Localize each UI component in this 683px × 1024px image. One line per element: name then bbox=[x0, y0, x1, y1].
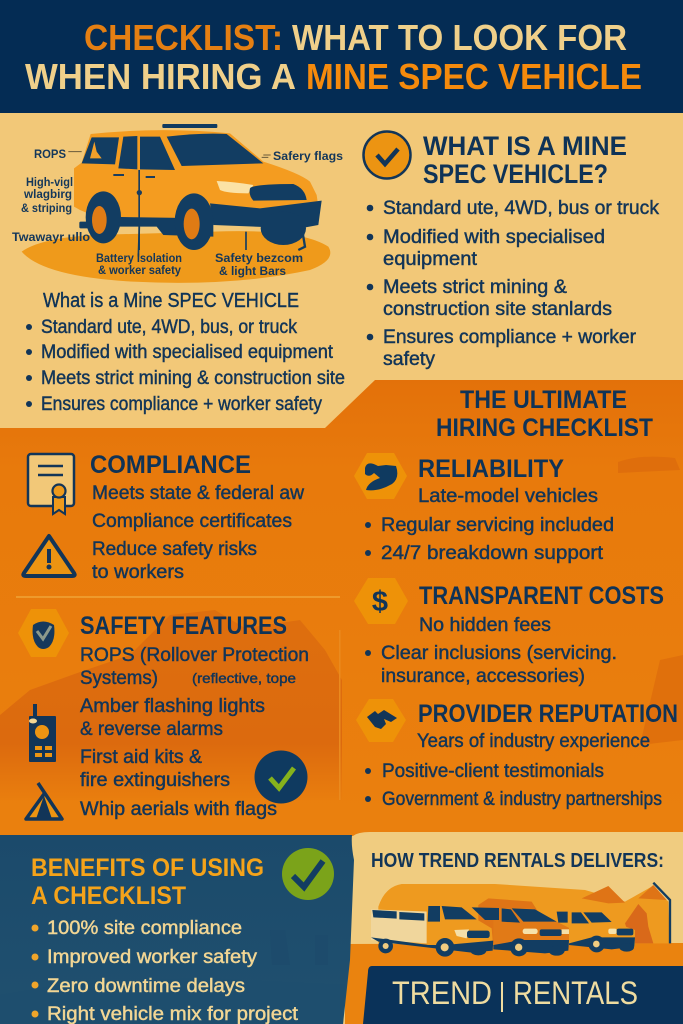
section: safety features: fire extinguishers bbox=[80, 770, 230, 791]
icon: safety shield hexagon bbox=[18, 609, 69, 657]
section: transparent costs: No hidden fees bbox=[419, 615, 551, 636]
icon: radio bbox=[29, 704, 56, 762]
section: provider reputation: Years of industry experience bbox=[417, 731, 650, 752]
list: what is a mine spec vehicle, right: Modified with specialised bbox=[383, 227, 605, 248]
heading: what is a mine spec vehicle: SPEC VEHICLE? bbox=[423, 159, 608, 189]
icon: warning triangle bbox=[23, 536, 75, 576]
section: safety features: Systems) bbox=[80, 668, 158, 689]
heading: what is a mine spec vehicle: WHAT IS A MINE bbox=[423, 131, 627, 161]
minibus bbox=[371, 909, 428, 943]
panel: orange checklist background bbox=[0, 380, 683, 836]
vehicle callout labels: & light Bars bbox=[219, 264, 286, 278]
section: reliability bbox=[365, 455, 614, 564]
section: compliance bbox=[90, 451, 304, 583]
illustration: vehicle fleet and landscape bbox=[371, 883, 670, 957]
heading: what is a mine spec vehicle bbox=[423, 131, 627, 189]
icon: dollar hexagon: $ bbox=[372, 586, 388, 618]
suv middle bbox=[472, 907, 570, 948]
list: what is a mine spec vehicle, right: Meets strict mining & bbox=[383, 277, 567, 298]
logo: trend rentals: RENTALS bbox=[513, 975, 638, 1011]
section: reliability: Regular servicing included bbox=[381, 515, 614, 536]
text block: what is a mine spec vehicle, left: What is a Mine SPEC VEHICLE bbox=[43, 290, 299, 312]
section: safety features: (reflective, tope bbox=[192, 670, 296, 686]
section: safety features: Amber flashing lights bbox=[80, 696, 265, 717]
panel: cream background bbox=[0, 113, 683, 433]
icon: green check badge bbox=[254, 750, 308, 804]
illustration: mine spec vehicle bbox=[22, 124, 330, 283]
text block: what is a mine spec vehicle, left bbox=[26, 290, 345, 415]
heading: the ultimate hiring checklist bbox=[436, 386, 653, 442]
logo: trend rentals bbox=[363, 966, 683, 1024]
section: safety features: & reverse alarms bbox=[80, 719, 223, 740]
section: reliability: RELIABILITY bbox=[418, 455, 564, 483]
list: benefits: Improved worker safety bbox=[47, 947, 258, 968]
heading: benefits bbox=[31, 854, 264, 910]
icon: reliability arm hexagon bbox=[354, 453, 407, 499]
section: compliance: to workers bbox=[92, 562, 184, 583]
text block: what is a mine spec vehicle, left: Ensures compliance + worker safety bbox=[41, 394, 322, 415]
section: safety features: SAFETY FEATURES bbox=[80, 612, 287, 640]
list: what is a mine spec vehicle, right: Ensures compliance + worker bbox=[383, 327, 637, 348]
text block: what is a mine spec vehicle, left: Modified with specialised equipment bbox=[41, 342, 334, 363]
icon: tent bbox=[26, 783, 62, 819]
icon: orange check badge bbox=[364, 132, 410, 178]
vehicle callout labels: Twawayr ullo bbox=[12, 230, 90, 244]
title: WHEN HIRING A bbox=[25, 56, 296, 97]
heading: the ultimate hiring checklist: HIRING CHECKLIST bbox=[436, 414, 653, 442]
section: reliability: Late-model vehicles bbox=[418, 486, 598, 507]
section: safety features: Whip aerials with flags bbox=[80, 799, 277, 820]
vehicle callout labels: Battery Isolation bbox=[96, 251, 182, 265]
text block: what is a mine spec vehicle, left: Meets strict mining & construction site bbox=[41, 368, 345, 389]
suv right bbox=[557, 912, 635, 947]
icon: handshake hexagon bbox=[356, 699, 406, 742]
section: provider reputation: Positive-client testimonials bbox=[382, 761, 604, 782]
section: provider reputation: Government & industry partnerships bbox=[382, 789, 662, 810]
section: compliance: COMPLIANCE bbox=[90, 451, 251, 479]
icon: compliance certificate bbox=[28, 454, 74, 514]
vehicle callout labels: Safety bezcom bbox=[215, 251, 303, 265]
section: compliance: Reduce safety risks bbox=[92, 539, 257, 560]
title: CHECKLIST: bbox=[84, 17, 283, 58]
list: what is a mine spec vehicle, right: construction site stanlards bbox=[383, 299, 612, 320]
list: what is a mine spec vehicle, right: Standard ute, 4WD, bus or truck bbox=[383, 198, 660, 219]
title: WHAT TO LOOK FOR bbox=[292, 17, 627, 58]
vehicle callout labels: ROPS bbox=[34, 147, 66, 161]
logo: trend rentals: TREND bbox=[392, 975, 492, 1011]
heading: benefits: BENEFITS OF USING bbox=[31, 854, 264, 882]
section: transparent costs bbox=[365, 582, 664, 687]
section: transparent costs: Clear inclusions (servicing. bbox=[381, 643, 617, 664]
list: benefits: Zero downtime delays bbox=[47, 976, 245, 997]
section: safety features: First aid kits & bbox=[80, 747, 202, 768]
vehicle callout labels: High-vigl bbox=[26, 175, 73, 189]
text block: what is a mine spec vehicle, left: Standard ute, 4WD, bus, or truck bbox=[41, 317, 297, 338]
title: MINE SPEC VEHICLE bbox=[306, 56, 642, 97]
panel: benefits of using a checklist bbox=[0, 835, 354, 1024]
section: compliance: Meets state & federal aw bbox=[92, 483, 304, 504]
section: reliability: 24/7 breakdown support bbox=[381, 543, 604, 564]
header bbox=[0, 0, 683, 113]
list: what is a mine spec vehicle, right: equipment bbox=[383, 249, 478, 270]
section: provider reputation bbox=[365, 700, 678, 810]
vehicle callout labels: & worker safety bbox=[98, 263, 181, 277]
vehicle callout labels: Safery flags bbox=[273, 149, 343, 163]
icon: green check bbox=[282, 848, 334, 900]
section: compliance: Compliance certificates bbox=[92, 511, 292, 532]
vehicle callout labels: & striping bbox=[21, 201, 72, 215]
list: benefits: 100% site compliance bbox=[47, 918, 242, 939]
section: safety features: ROPS (Rollover Protection bbox=[80, 645, 309, 666]
section: safety features bbox=[80, 612, 309, 820]
title bbox=[25, 17, 642, 97]
vehicle callout labels bbox=[12, 147, 343, 278]
vehicle callout labels: wlagbirg bbox=[23, 187, 72, 201]
section: transparent costs: insurance, accessories) bbox=[381, 666, 585, 687]
heading: the ultimate hiring checklist: THE ULTIMATE bbox=[460, 386, 627, 414]
heading: benefits: A CHECKLIST bbox=[31, 882, 186, 910]
panel: how trend rentals delivers bbox=[345, 832, 683, 1024]
list: benefits bbox=[32, 918, 299, 1024]
list: what is a mine spec vehicle, right: safety bbox=[383, 349, 436, 370]
icon: dollar hexagon bbox=[354, 578, 408, 624]
list: what is a mine spec vehicle, right bbox=[367, 198, 660, 370]
